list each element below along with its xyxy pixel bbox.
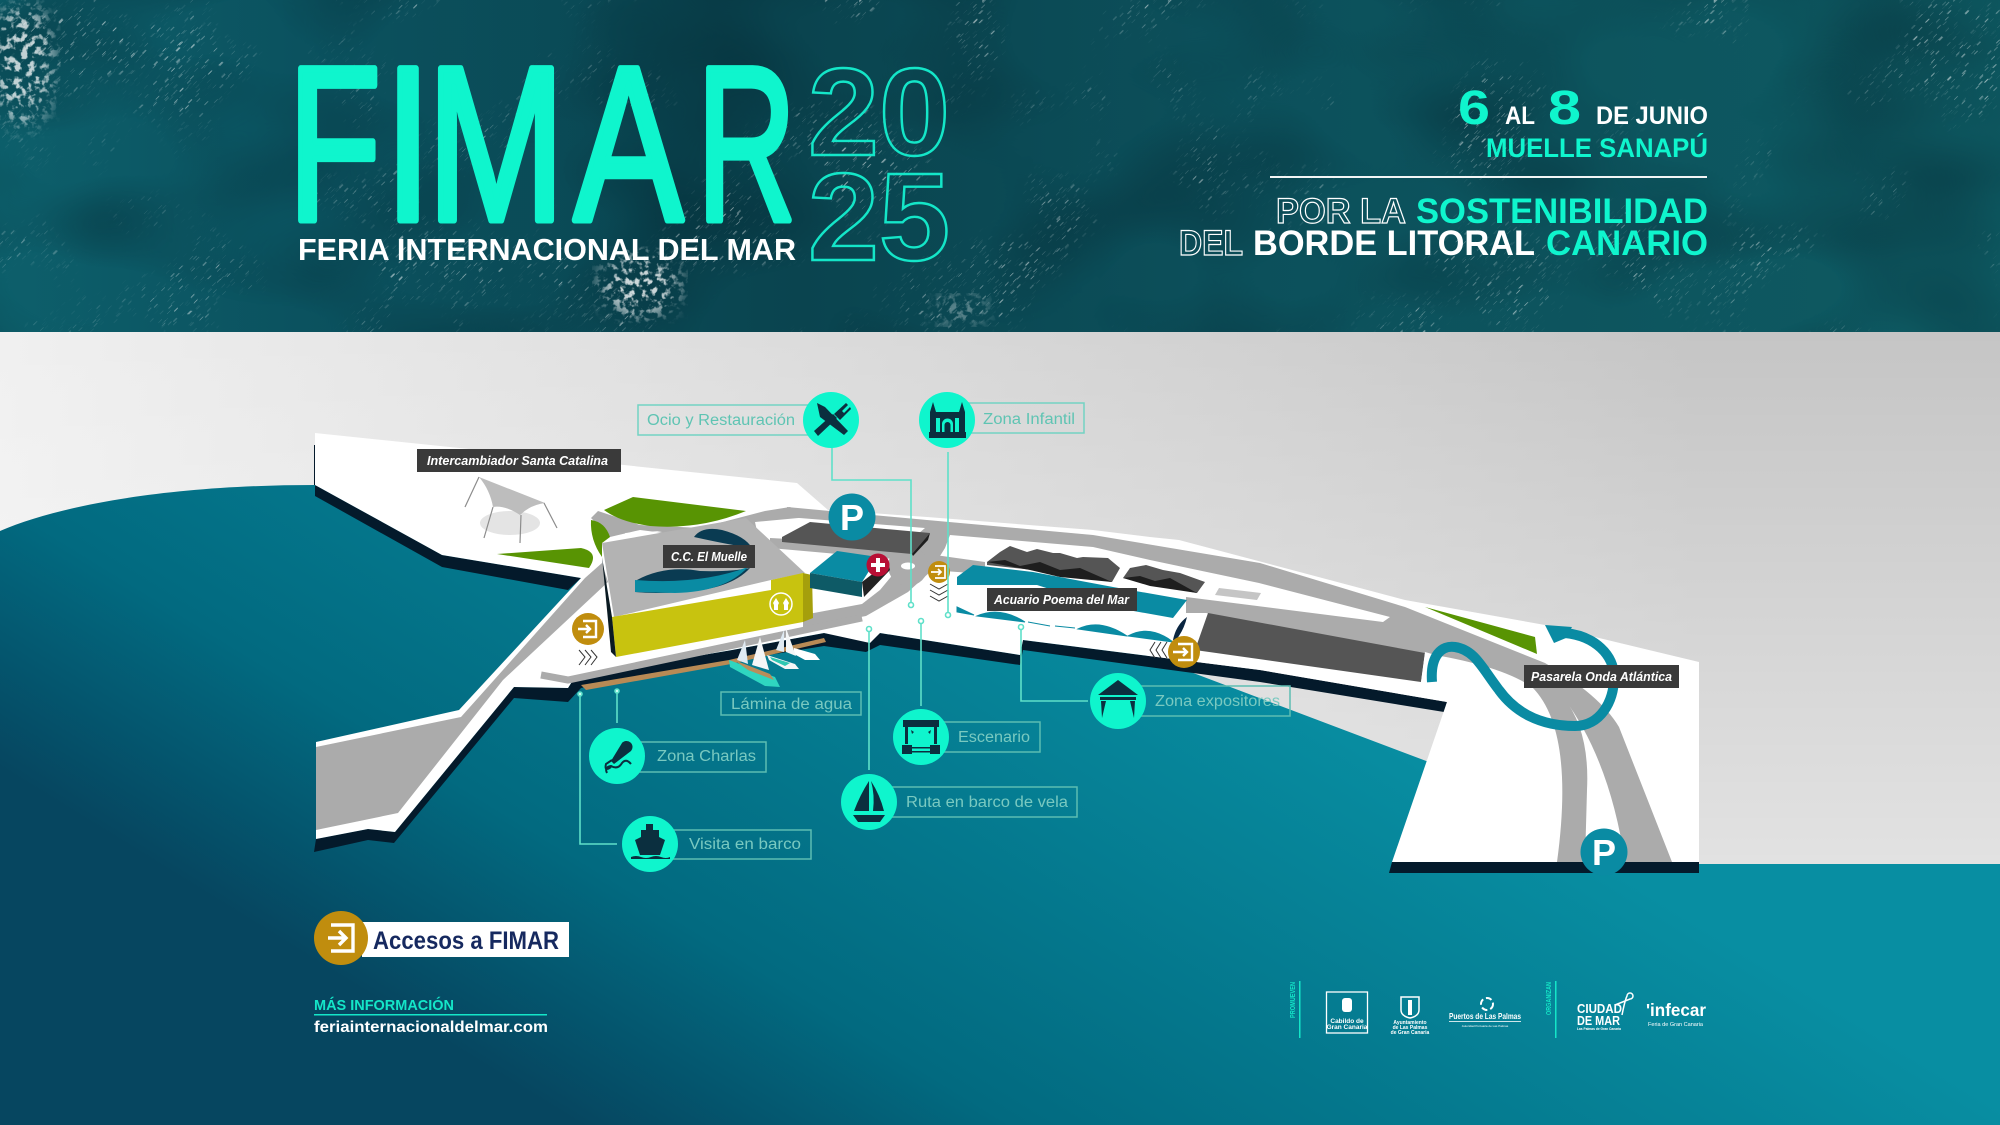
header: ocean photo band xyxy=(0,0,2000,332)
icon: stage xyxy=(902,720,940,754)
logo: Cabildo de Gran Canaria xyxy=(1326,992,1368,1033)
subtitle: Feria Internacional del Mar: FERIA INTERNACIONAL DEL MAR xyxy=(298,232,796,267)
more information: MÁS INFORMACIÓN xyxy=(314,996,454,1014)
logo: Puertos de Las Palmas: Puertos de Las Palmas xyxy=(1449,1011,1521,1021)
sponsors: promueven: PROMUEVEN xyxy=(1290,982,1297,1018)
label: C.C. El Muelle xyxy=(663,545,755,568)
logo: Ayuntamiento de Las Palmas: de Las Palmas xyxy=(1393,1025,1428,1031)
event date and place: 6 xyxy=(1458,82,1490,135)
callout: Zona expositores: Zona expositores xyxy=(1155,693,1280,710)
icon: parking top xyxy=(828,494,876,540)
callout: Lámina de agua: Lámina de agua xyxy=(731,696,852,713)
map: event tent xyxy=(465,477,557,543)
map: dark glass blade xyxy=(1173,617,1187,640)
label: Acuario Poema del Mar xyxy=(987,588,1137,611)
sponsors: organizan xyxy=(1546,981,1706,1038)
callout: Zona Charlas xyxy=(589,728,766,784)
callout: Escenario xyxy=(893,709,1040,765)
title: FIMAR logotype: I xyxy=(384,21,432,267)
map: aquarium rocks xyxy=(987,546,1205,593)
icon: access arrow xyxy=(328,925,353,951)
slogan xyxy=(1179,192,1708,263)
slogan: BORDE LITORAL xyxy=(1253,224,1535,263)
logo: Ayuntamiento de Las Palmas xyxy=(1391,997,1430,1036)
logo: Ciudad de Mar: DE MAR xyxy=(1577,1013,1621,1028)
icon: parking top: P xyxy=(840,497,864,538)
label: Acuario Poema del Mar: Acuario Poema del Mar xyxy=(993,592,1130,607)
callout: Visita en barco xyxy=(622,816,811,872)
event date and place: DE JUNIO xyxy=(1596,102,1708,130)
map: green areas xyxy=(497,497,1537,654)
map: dock boardwalk xyxy=(581,638,826,690)
map: small parking strip xyxy=(1215,588,1261,600)
icon: parking bottom: P xyxy=(1592,832,1616,873)
legend: accesses: Accesos a FIMAR xyxy=(373,927,559,955)
title: FIMAR logotype: R xyxy=(697,21,796,267)
callout: Ocio y Restauración xyxy=(638,392,859,448)
legend: accesses xyxy=(314,911,569,965)
icon: microphone xyxy=(606,741,633,773)
callout: Lámina de agua xyxy=(721,692,861,715)
logo: Cabildo de Gran Canaria: Cabildo de xyxy=(1330,1018,1364,1025)
label: C.C. El Muelle: C.C. El Muelle xyxy=(671,549,747,564)
icon: sailboat xyxy=(853,781,885,822)
callout: Zona Infantil: Zona Infantil xyxy=(983,411,1075,428)
callout: Escenario: Escenario xyxy=(958,729,1030,746)
logo: Ayuntamiento de Las Palmas: Ayuntamiento xyxy=(1393,1020,1427,1026)
icon: ship xyxy=(631,824,670,859)
callout: Zona expositores xyxy=(1090,673,1290,729)
year: 2025 outlined: 25 xyxy=(808,149,950,287)
divider under date xyxy=(1270,176,1707,178)
icon: left access xyxy=(572,613,604,645)
map: dark quay edges xyxy=(314,445,1699,873)
title: FIMAR logotype: F xyxy=(288,21,381,267)
map: Pasarela Onda Atlántica bridge xyxy=(1432,625,1614,726)
callout: Ruta en barco de vela xyxy=(841,774,1077,830)
place labels xyxy=(417,449,1679,688)
map: medical building xyxy=(810,551,890,597)
logo: Ciudad de Mar: CIUDAD xyxy=(1577,1001,1622,1016)
icon: parking bottom xyxy=(1580,828,1628,876)
callout: Ruta en barco de vela: Ruta en barco de vela xyxy=(906,794,1068,811)
background: light grey gradient xyxy=(0,332,2000,1125)
sponsors: organizan: ORGANIZAN xyxy=(1546,982,1553,1015)
icon: first aid xyxy=(866,554,890,576)
slogan: CANARIO xyxy=(1546,224,1708,263)
map: aquarium water xyxy=(957,565,1187,642)
event date and place: 8 xyxy=(1548,82,1581,135)
map: roundabout island xyxy=(901,562,915,570)
label: Pasarela Onda Atlántica xyxy=(1524,665,1679,688)
slogan: POR LA xyxy=(1276,192,1406,231)
logo: Ayuntamiento de Las Palmas: de Gran Canaria xyxy=(1391,1030,1430,1036)
title: FIMAR logotype: M xyxy=(427,21,565,267)
map: C.C. El Muelle building xyxy=(602,518,813,657)
logo: Puertos de Las Palmas xyxy=(1449,998,1521,1028)
callout: Zona Infantil xyxy=(919,392,1084,448)
logo: Ciudad de Mar xyxy=(1577,993,1633,1031)
icon: top access xyxy=(928,561,950,583)
leader lines xyxy=(578,447,1088,844)
callout: Visita en barco: Visita en barco xyxy=(689,836,801,853)
logo: Ciudad de Mar: Las Palmas de Gran Canaria xyxy=(1577,1026,1622,1031)
more information xyxy=(314,996,548,1036)
callout: Zona Charlas: Zona Charlas xyxy=(657,748,756,765)
label: Pasarela Onda Atlántica: Pasarela Onda Atlántica xyxy=(1531,669,1672,684)
label: Intercambiador Santa Catalina xyxy=(417,449,621,472)
icon: right access xyxy=(1168,636,1200,668)
label: Intercambiador Santa Catalina: Intercambiador Santa Catalina xyxy=(427,453,608,468)
sponsors: promueven xyxy=(1290,981,1521,1038)
slogan: DEL xyxy=(1179,224,1243,263)
background: teal sea wave xyxy=(0,485,2000,1125)
title: FIMAR logotype xyxy=(288,21,796,267)
map: sailboats xyxy=(729,628,820,687)
callout: Ocio y Restauración: Ocio y Restauración xyxy=(647,412,795,429)
icon: restrooms xyxy=(770,593,792,615)
logo: Infecar: 'infecar xyxy=(1646,1000,1706,1020)
map: dark grey parking buildings xyxy=(782,522,1432,684)
chevrons: left access xyxy=(579,650,597,665)
event date and place: AL xyxy=(1505,102,1535,130)
icon: cutlery xyxy=(814,403,851,436)
year: 2025 outlined xyxy=(808,44,950,287)
icon: exhibitor tent xyxy=(1098,680,1138,718)
map: white land xyxy=(315,433,1699,862)
map: grey roads xyxy=(316,507,1672,862)
logo: Cabildo de Gran Canaria: Gran Canaria xyxy=(1327,1024,1368,1031)
logo: Puertos de Las Palmas: Autoridad Portuaria de Las Palmas xyxy=(1462,1024,1509,1028)
year: 2025 outlined: 20 xyxy=(808,44,950,182)
icon: castle xyxy=(929,402,966,438)
event date and place xyxy=(1458,82,1708,163)
chevrons: top access xyxy=(930,584,948,601)
chevrons: right access xyxy=(1150,642,1167,658)
slogan: SOSTENIBILIDAD xyxy=(1416,192,1708,231)
title: FIMAR logotype: A xyxy=(574,21,683,267)
logo: Infecar: Feria de Gran Canaria xyxy=(1648,1022,1703,1028)
map: port site plan xyxy=(314,433,1699,876)
event date and place: MUELLE SANAPÚ xyxy=(1486,132,1708,163)
more information: feriainternacionaldelmar.com xyxy=(314,1019,548,1036)
